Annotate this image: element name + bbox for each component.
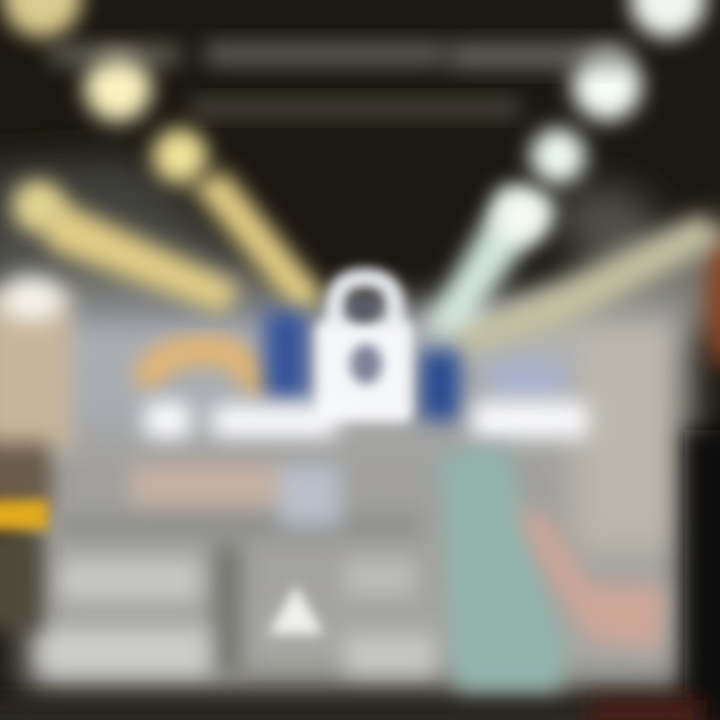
white signage left [145,402,337,438]
pillar yellow band [0,500,48,530]
left pillar [0,276,72,630]
blurred subtitle bar [190,98,520,118]
white signage right [472,362,588,438]
ceiling lights [2,0,706,244]
person in teal [440,445,565,690]
side ceiling panels [0,155,720,330]
yellow ceiling streaks [30,170,325,320]
blue panels [264,310,460,420]
padlock icon [316,278,412,422]
white and teal ceiling streaks [425,185,720,360]
floor tile pattern [40,465,435,675]
white floor marker [268,585,324,634]
orange arc sign [145,350,262,395]
floor shadow edge [0,700,720,720]
floor and back wall [25,305,690,690]
blurred title bar [50,42,630,70]
right dark figure [590,230,720,720]
pink hand [515,510,665,650]
